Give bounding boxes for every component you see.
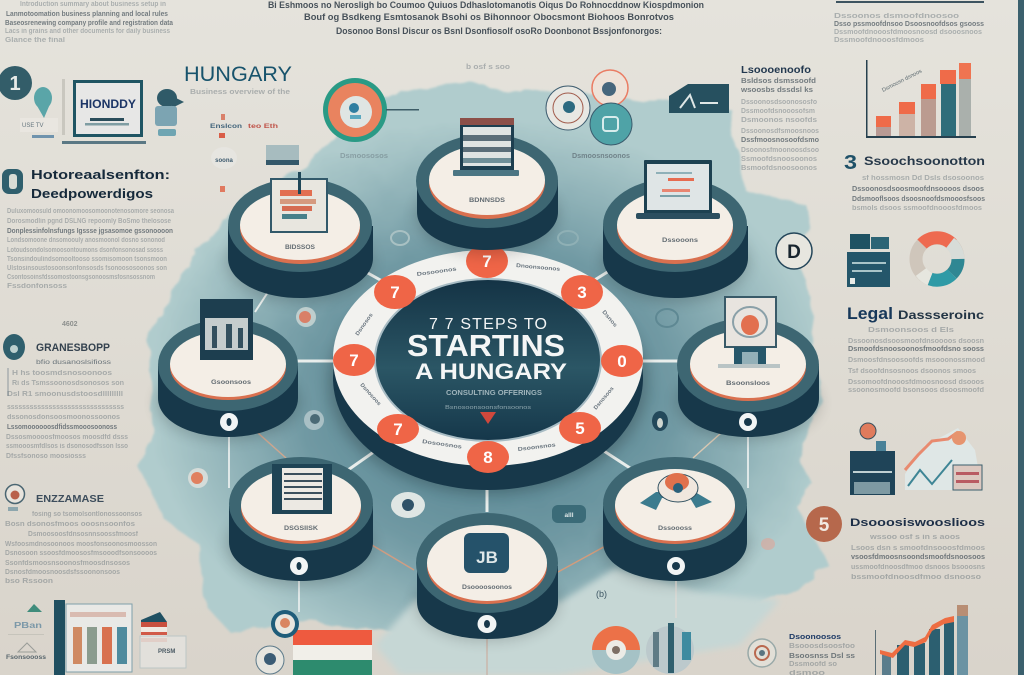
small map glyphs: alll [564,512,574,519]
caption: Gsoonsoos [211,379,251,386]
panel: step platform lower left [226,457,374,585]
intro text, top left: Lanmotoomation business planning and local rules [6,9,168,18]
heading: step 2 [31,167,170,201]
icon: laptop with HUNGARY label: HIONDDY [80,97,136,111]
caption: BIDSSOS [285,244,316,251]
text block: top right: Dsso pssmoofdnsoo Dsoosnoofdsos gsooss [834,19,984,28]
hub number badges: 8 [483,448,493,467]
text block: upper right of map: Bsldsos dsmssoofd [741,76,816,85]
icon: compass emblem [640,473,712,510]
text block: step 3 left: Ri ds Tsmssoonosdsonosos son [12,380,124,387]
text block: step 3 right: sf hossmosn Dd Dsls dsosoonos [862,175,984,182]
text block: step 3 left: Lssomoooooosdfidssmooosoonoss [7,422,117,431]
panel: step platform lower right [601,457,749,585]
text block: upper right of map: Dssmoofdsnooosofsm [741,108,815,115]
icons, bottom left [6,604,47,661]
icon: document chart [271,172,327,232]
text block: step 5: Lsoos dsn s smoofdnsooosfdmoos [851,545,985,552]
text block: top right: Dssmoofdnooosfdmoos [834,37,924,44]
caption: Dsoooosoonos [462,584,512,591]
text block: upper right of map: Ssmoofdsnoosoonos [741,156,817,163]
connector node dots [220,413,757,633]
ring captions: Dosoosnos [422,439,462,451]
text block: bottom right: Bsoosnss Dsl ss [789,651,855,660]
text block: step 4 left [5,511,157,585]
heading: step 4 left: ENZZAMASE [36,493,104,505]
icon: large green ring [323,78,419,142]
step 2 badge [2,169,23,194]
ring captions: Dsnosos [355,312,375,337]
donut chart [916,238,958,280]
text block: bottom right: Bsooosdsoosfoo [789,643,855,650]
text block: step 2 [7,208,174,290]
text block: Legal: Dsmoofdsnoosoonosfmoofdsno sooss [848,344,984,353]
icons: small round seals by flag [256,610,299,674]
text block: step 3 left: Dfssfsonoso moosiosss [6,453,86,460]
icon: building [850,423,895,495]
heading: step 2: Deedpowerdigos [31,186,153,201]
heading: step 3 left [36,321,112,366]
text block: Legal: Dssomoofdnooosfdmoosnoosd dsooos [848,379,984,386]
caption under HUNGARY: Business overview of the [190,89,290,96]
intro text, top centre: Bi Eshmoos no Nerosligh bo Coumoo Quiuos Ddhaslotomanotis Oiqus Do Rohnocddnow Kiospdmonion [268,0,704,11]
text block: upper right of map: Dsmoonos nsoofds [741,117,817,124]
text block: upper right of map: Dssfmoosnosoofdsmo [741,135,819,144]
panel: step platform middle left [156,299,300,440]
heading: step 2: Hotoreaalsenfton: [31,167,170,182]
step 3 number, right: 3 [844,152,857,174]
icon: dashboard panels [847,234,890,287]
text block: step 3 left: ssmooosmfdlsos is dsonosodfsson lsso [6,443,128,450]
icon: laptop [453,118,519,176]
heading: Legal: Dassseroinc [898,308,984,322]
hub number badges: 7 [349,351,359,370]
intro text, top centre: Dosonoo Bonsl Discur os Bsnl Dsonfiosolf osoRo Doonbonot Bssjonfonorgos: [336,26,662,37]
text block: upper right of map: Dssoonosdsoonososfo [741,99,817,106]
hub number badges: 7 [482,252,492,271]
hub number badges: 5 [575,419,585,438]
icon: teal badge [155,89,184,136]
text block: step 4 left: bso Rssoon [5,578,53,585]
text block: step 5 [851,534,985,581]
text block: step 5: ussmoofdnoosdfmoo dsnoos bsooosns [851,564,985,571]
hub title: STARTINS [407,328,565,363]
caption: right of top platform: Dsmoosnsoonos [572,153,630,160]
text block: Legal [848,327,985,394]
intro text, top centre: Bouf og Bsdkeng Esmtosanok Bsohi os Bihonnoor Obocsmont Biohoos Bonrotvos [304,12,674,23]
ring captions: Dosooonos [416,266,457,278]
icon: pin and note [20,79,65,138]
hub inner disc [375,279,601,441]
bar chart, top right [866,60,976,138]
hub number badges: 3 [577,283,587,302]
icons, bottom left: Fsonsoooss [6,655,47,661]
text block: step 3 left: dssonosdonsoosmoonossoonos [7,414,120,421]
icon: step 7 ring: D [787,242,801,263]
ring captions: Dsnosoos [359,382,382,407]
bar chart, top right: Dsmoosn dsnoos [881,68,923,94]
icon: bottom centre tower graphic [646,623,694,674]
small labels, upper left of map [210,114,278,192]
icon: laptop with HUNGARY label [62,80,146,144]
text block: step 2: Ulstosinsoustosoonsonfonsosds fsonoososoonos son [7,265,167,272]
hub number badges: 7 [393,420,403,439]
panel: step platform middle right [676,297,820,440]
text block: Legal: Tsf dsoofdnsosnoos dsoonos smoos [848,368,976,375]
text block: upper right of map: Lsoooenoofo [741,65,811,76]
text block: step 2: Lotoudsondolsomoosontoumons dsonfonsonosad ssoss [7,247,163,254]
icon: trend map [905,428,982,490]
text block: step 5: wssoo osf s in s aoos [869,534,960,541]
small labels, upper left of map: soona [215,158,233,164]
caption: DSGSIISK [284,525,318,532]
icon: framed picture [200,299,253,360]
hub number badges: 7 [390,283,400,302]
hub number badges: 0 [617,352,627,371]
icon: small flag card [140,612,186,668]
hub number badges [333,244,643,473]
step 4 badge, left [6,484,24,511]
icon: small card [266,145,299,165]
text block: Legal: ssoonosmoofd bsonsoos dsoosmoofd [848,387,984,394]
area and bar chart, bottom right [875,605,968,675]
right edge strip [1018,0,1024,675]
heading: Legal: Legal [847,304,893,323]
text block: step 4 left: Dsmoosoosfdnsosnnsoossfmoosf [28,531,139,538]
hub base [333,266,643,490]
text block: step 2: Londsomoone dnsomoouly anosmoonol dosno sononod [7,237,165,244]
step 5 badge: 5 [819,515,830,536]
text block: step 5: vsoosfdmoosnsoondsmoofdsnoosoos [851,552,985,561]
text block: step 3 left: Dssosmoooosfmoosos moosdfd dsss [6,434,128,441]
flag of Hungary [293,630,372,675]
text block: bottom right: Dssmoofd so [789,661,837,668]
text block: step 2: Dorosmodlin pgnd DSLNG repoomly BoSmo thelosose [7,218,171,225]
icon: small flag card: PRSM [158,649,175,655]
text block: step 3 left: sssssssssssssssssssssssssssssss [7,404,124,411]
text block: upper right of map: Dsoonosfmoonoosdsoo [741,147,819,154]
small labels, upper left of map: teo Eth [248,124,278,130]
panel: step platform upper left [226,172,374,302]
heading: step 3 right: Ssoochsoonotton [864,154,985,168]
hub title: Bsnosoonsoonsfonsoonos [445,405,531,411]
text block: step 4 left: Dsnosfdmoosnoosdsfssoononsoos [5,569,120,576]
intro text, top left: Introduction summary about business setup in [20,1,166,8]
panel: step platform bottom [415,513,559,641]
map of Hungary [140,84,830,655]
intro text, top centre [268,0,704,37]
bar chart, bottom left [54,600,132,675]
text block: top right: Dssoonos dsmoofdnoosoo [834,13,959,20]
text block: step 4 left: Ssonfdsmoosnsoonosfmoosdnsosos [5,560,130,567]
intro text, top left [5,1,174,44]
step 5 badge [806,506,842,542]
icon: laptop [636,160,720,219]
text block: step 3 right: bsmols dsoos ssmoofdnooosfdmoos [852,205,982,212]
centre hub [328,250,648,494]
text block: Legal: Dssoonosdsoosmoofdnsoooos dsoosn [848,338,984,345]
top right rule [836,1,984,3]
icons, bottom left: PBan [14,621,42,630]
text block: bottom right: Dsoonoosos [789,634,841,641]
icon: pin and note: USE TV [22,123,44,129]
text block: step 2: Tsonsindoulindsomooltooso ssomisomoon tsonsmoon [7,256,167,263]
hub title: A HUNGARY [415,359,567,384]
text block: bottom right [789,634,855,675]
text block: step 4 left: Wsfoosmdnosoonoos moosfonsoonosmoosson [5,541,157,548]
icon: bottom centre pie [592,626,640,674]
hub title: 7 7 STEPS TO [429,316,547,333]
hub pin [480,412,496,424]
heading: step 3 left: 4602 [62,321,78,328]
heading: step 5: Dsooosiswooslioos [850,517,985,529]
icon: dark camera: JB [476,548,498,567]
ring captions [355,263,618,453]
small labels, upper left of map: Enslcon [210,124,242,130]
caption: left of top platform: Dsmoososos [340,153,388,160]
text block: step 3 left: H hs toosmdsnosoonoos [12,370,112,377]
hub ring [333,250,643,466]
icon: document [272,464,332,514]
ring captions: Dsoonsnos [518,442,556,453]
ring captions: Dsnos [600,309,618,329]
text block: step 3 right [852,175,985,212]
panel: step platform top [415,118,559,255]
text block: step 2: Fssdonfonsoss [7,283,67,290]
step 1 badge: 1 [9,73,21,95]
ring captions: Dsnosoos [593,386,616,411]
intro text, top left: Baseosrenewing company profile and registration data [5,18,174,27]
connector lines [229,215,748,675]
small map glyphs [188,231,775,550]
pale map foot [375,568,780,675]
heading: Legal [847,304,984,323]
text block: step 3 right: Ddsmooflsoos dsoosnoofdsmooosfsoos [852,194,985,203]
text block: Legal: Dsmoonsoos d Els [868,327,954,334]
caption: Dssoooss [658,525,692,532]
heading: HUNGARY: HUNGARY [184,63,292,86]
text block: step 3 left [6,368,128,460]
text block: step 4 left: Dsnosoon ssoosfdmoososfmsooodfsonsoooos [5,550,157,557]
icon: dark camera [464,533,509,573]
text block: top right: Dssmoofdnooosfdmoosnoosd dsooosnoos [834,29,982,36]
step 1 badge [0,66,32,100]
ring captions: Dnoonsoonos [516,263,560,273]
hub title: CONSULTING OFFERINGS [446,390,542,397]
caption: Dssooons [662,237,698,244]
caption: BDNNSDS [469,197,506,204]
text block: step 5: bssmoofdnoosdfmoo dsnooso [851,574,981,581]
icon: bottom right ring [748,639,776,667]
text block: step 3 right: Dssoonosdsoosmoofdnsoooos dsoos [852,184,984,193]
caption: lower right of bottom platform: (b) [596,589,607,599]
icon: framed seal on stand [718,297,780,368]
heading: step 3 left: bfio dusanoslsifioss [36,359,112,366]
icons: three circles [546,70,632,145]
text block: step 2: Duluxomoosuld omoonomoosomoonotenosomore seonosa [7,208,174,215]
intro text, top left: Glance the final [5,37,65,44]
text block: step 2: Csontosoinsfdssomostoonsgsonoosmsfosnsossnom [7,274,155,281]
intro text, top left: Lacs in grains and other documents for daily business [5,28,170,35]
text block: upper right of map [740,65,819,172]
text block: step 2: Donplessinfolnsfungs Igssse jgsasomoe gssonoooon [7,226,173,235]
caption: above top platform: b osf s soo [466,64,510,71]
caption: Bsoonsloos [726,380,770,387]
hub title [407,316,567,411]
text block: upper right of map: Dssoonosdfsmoosnoos [741,128,819,135]
text block: upper right of map: Bsmoofdsnoosoonos [741,165,817,172]
step 3 badge, left [3,334,25,360]
icon: dark house tile [669,84,729,113]
text block: top right [834,13,984,44]
text block: step 3 left: Dsl R1 smoonusdstoosdlllllllll [7,391,123,398]
panel: step platform upper right [601,160,749,302]
text block: step 4 left: Bosn dsonosfmoos ooosnsoonfos [5,521,135,528]
text block: Legal: Dsmoosfdnsoosoofds msooonossmood [848,357,985,364]
text block: upper right of map: wsoosbs dssdsl ks [740,85,813,94]
text block: step 4 left: fosing so tsomolsontlonossoonsos [32,511,142,518]
heading: step 3 left: GRANESBOPP [36,342,110,354]
icon: step 7 ring [776,233,812,269]
